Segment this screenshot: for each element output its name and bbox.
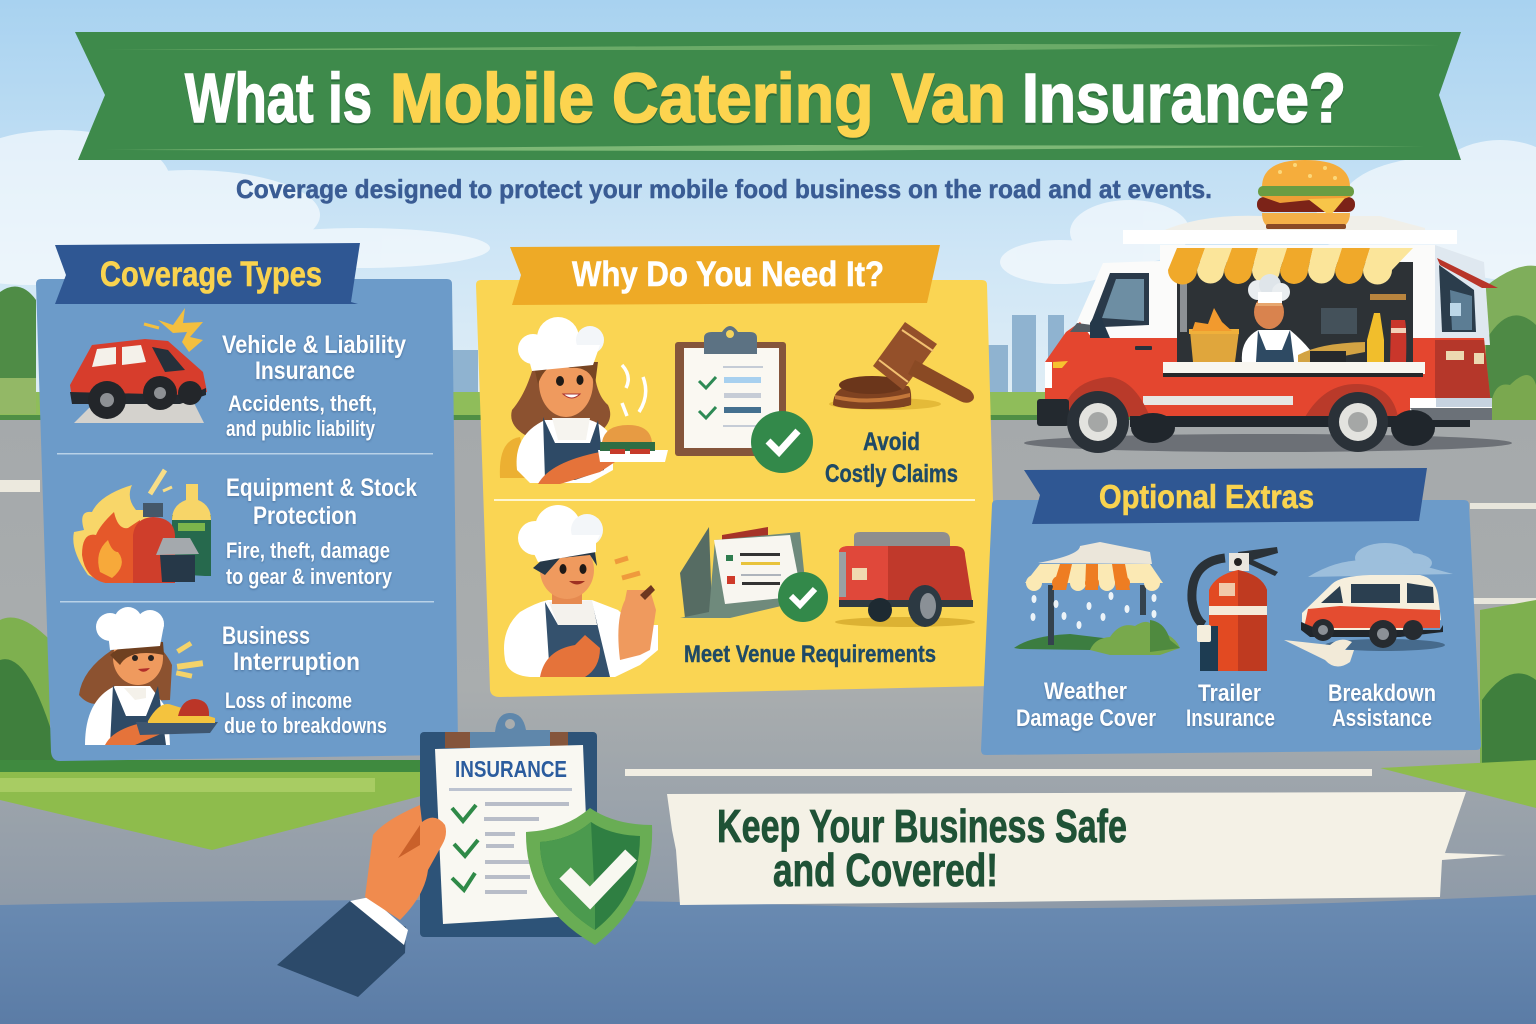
title text: Mobile Catering Van bbox=[390, 59, 1006, 137]
text: extras labels: Weather bbox=[1044, 678, 1127, 705]
text: vehicle and liability: Vehicle & Liability bbox=[222, 331, 406, 359]
text: equipment and stock: Protection bbox=[253, 502, 357, 530]
burger bbox=[1257, 160, 1355, 229]
icon: clipboard checklist bbox=[675, 326, 813, 473]
title text: What is bbox=[185, 59, 372, 137]
text: meet venue requirements: Meet Venue Requirements bbox=[684, 641, 936, 668]
awning bbox=[1168, 248, 1413, 284]
text: vehicle and liability: and public liability bbox=[226, 416, 376, 441]
banner text: Keep Your Business Safe bbox=[717, 800, 1127, 852]
text: avoid costly claims bbox=[825, 428, 958, 488]
icon: chef with tray bbox=[79, 607, 218, 745]
panel: optional extras bbox=[981, 468, 1481, 755]
title text: Insurance? bbox=[1022, 59, 1346, 137]
icon: documents with check bbox=[680, 527, 828, 622]
heading: optional extras: Optional Extras bbox=[1099, 478, 1314, 515]
text: vehicle and liability: Accidents, theft, bbox=[228, 391, 377, 416]
icon: crashed car bbox=[70, 308, 207, 423]
text: equipment and stock bbox=[226, 474, 417, 589]
icon: gavel bbox=[829, 322, 974, 410]
icon: weather awning bbox=[1014, 542, 1180, 655]
text: vehicle and liability bbox=[222, 331, 406, 441]
text: extras labels: Trailer bbox=[1198, 680, 1261, 707]
icon: breakdown van bbox=[1284, 543, 1453, 667]
icon: trailer bbox=[835, 532, 975, 627]
text: business interruption bbox=[222, 622, 387, 738]
text: equipment and stock: Equipment & Stock bbox=[226, 474, 417, 502]
text: business interruption: Loss of income bbox=[225, 688, 352, 713]
text: business interruption: Interruption bbox=[233, 648, 360, 676]
icon: fire extinguisher bbox=[1192, 547, 1278, 671]
text: extras labels: Breakdown bbox=[1328, 680, 1436, 707]
icon: insurance clipboard with hand and shield bbox=[277, 713, 652, 997]
text: equipment and stock: Fire, theft, damage bbox=[226, 538, 390, 563]
bottom banner bbox=[667, 792, 1506, 905]
icon: insurance clipboard with hand and shield: INSURANCE bbox=[455, 756, 567, 782]
text: avoid costly claims: Costly Claims bbox=[825, 460, 958, 488]
text: extras labels: Insurance bbox=[1186, 705, 1275, 732]
subtitle: Coverage designed to protect your mobile food business on the road and at events. bbox=[236, 174, 1212, 204]
text: extras labels: Damage Cover bbox=[1016, 705, 1156, 732]
text: extras labels bbox=[1016, 678, 1436, 732]
title banner bbox=[75, 32, 1461, 160]
heading: why bbox=[510, 245, 940, 305]
van chef bbox=[1242, 274, 1365, 362]
heading: optional extras bbox=[1024, 468, 1427, 524]
text: avoid costly claims: Avoid bbox=[863, 428, 920, 456]
heading: why: Why Do You Need It? bbox=[572, 255, 884, 294]
heading: coverage types bbox=[55, 243, 360, 304]
banner text bbox=[717, 800, 1127, 896]
banner text: and Covered! bbox=[773, 844, 998, 896]
panel: why do you need it bbox=[476, 245, 998, 697]
text: business interruption: Business bbox=[222, 622, 310, 650]
text: extras labels: Assistance bbox=[1332, 705, 1432, 732]
panel: coverage types bbox=[36, 243, 458, 761]
text: equipment and stock: to gear & inventory bbox=[226, 564, 393, 589]
hand bbox=[277, 805, 446, 997]
icon: chef pointing bbox=[504, 505, 658, 677]
text: vehicle and liability: Insurance bbox=[255, 357, 355, 385]
icon: fire and equipment bbox=[73, 470, 211, 583]
heading: coverage types: Coverage Types bbox=[100, 255, 322, 294]
food truck with burger bbox=[1024, 160, 1512, 453]
shield bbox=[526, 808, 652, 945]
icon: chef with burger bbox=[500, 317, 668, 484]
text: business interruption: due to breakdowns bbox=[224, 713, 387, 738]
